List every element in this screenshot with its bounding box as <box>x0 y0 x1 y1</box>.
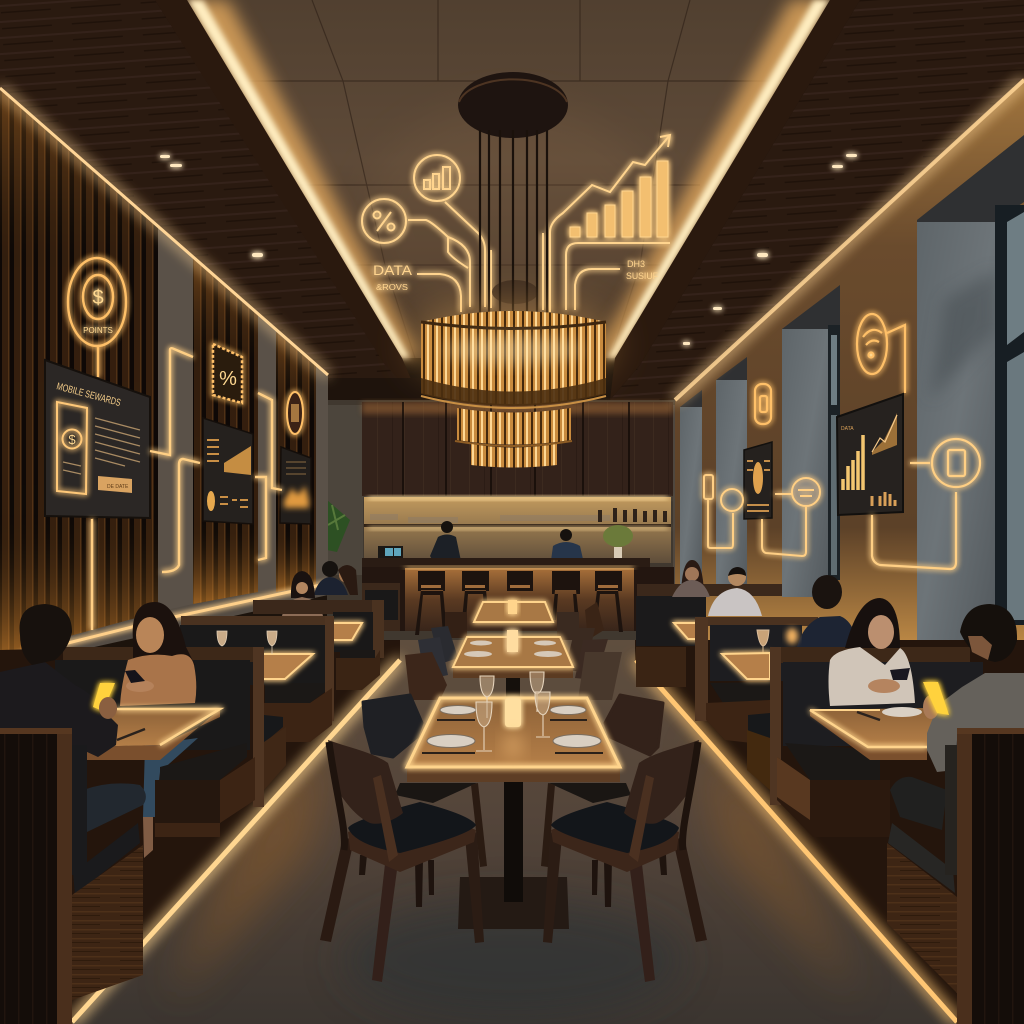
data label neon: DATA <box>373 262 413 278</box>
lower crystal tier <box>471 444 557 468</box>
top crystal tier <box>413 305 613 408</box>
growth bars <box>570 161 668 237</box>
concrete ceiling panel <box>185 0 830 358</box>
window <box>995 205 1024 625</box>
front right table <box>810 707 947 760</box>
sweater <box>120 654 196 706</box>
diner woman back booth <box>282 571 323 616</box>
recessed ceiling lights <box>160 154 857 345</box>
right booth platform <box>635 640 1024 1024</box>
wall bottom glow line <box>0 583 330 660</box>
front left table <box>80 709 220 760</box>
icon: circle node <box>762 478 820 556</box>
concrete recess 1 <box>917 135 1024 642</box>
left timber soffit <box>0 0 420 402</box>
front back-row chairs <box>359 695 667 895</box>
wine glasses <box>476 672 550 751</box>
wall top glow line <box>0 88 328 375</box>
diner man white shirt <box>708 567 762 616</box>
dashboard screen 3 <box>280 447 311 524</box>
plates <box>427 706 601 748</box>
data label neon <box>373 262 413 292</box>
panel: right wall <box>675 78 1024 642</box>
main table <box>407 672 620 782</box>
candle <box>503 698 523 759</box>
front right partition <box>957 728 1024 1024</box>
circuit lines left <box>408 202 491 312</box>
right timber soffit <box>610 0 1024 400</box>
data label neon: &ROVS <box>376 283 408 292</box>
main table pedestal <box>458 782 569 929</box>
large analytics screen <box>837 394 903 515</box>
booth 2 <box>180 616 334 742</box>
icon: wifi badge <box>857 314 905 393</box>
points badge: $ <box>92 287 104 309</box>
hair <box>133 602 195 665</box>
middle table <box>453 630 573 703</box>
mobile rewards screen: MOBILE SEWARDS <box>55 381 122 409</box>
diner woman far right <box>672 560 710 597</box>
wine glass and table booth 2 <box>722 630 770 679</box>
diner man dark suit <box>786 575 857 647</box>
ceiling canopy <box>458 72 568 304</box>
large analytics screen: DATA <box>841 426 854 432</box>
icon: percent coupon: % <box>219 368 237 390</box>
face <box>136 617 164 653</box>
chair: front left <box>320 740 484 982</box>
man front left <box>0 604 146 840</box>
far right booth <box>636 584 782 687</box>
icon: rounded device <box>755 384 771 424</box>
right wall neon signage <box>704 314 980 569</box>
POS screen <box>378 546 403 558</box>
diner woman front left <box>120 602 198 858</box>
left booth platform <box>0 640 400 1024</box>
far dining table <box>445 600 579 640</box>
chair: front right <box>543 740 707 982</box>
growth arrow line <box>543 135 670 312</box>
lit back shelves <box>364 496 671 563</box>
phone glowing <box>93 683 115 711</box>
foot <box>143 817 153 858</box>
ceiling neon data graphics <box>362 135 670 312</box>
dashboard screen 2 <box>203 418 253 524</box>
mobile rewards screen <box>45 360 150 518</box>
panel: back wall and bar <box>327 400 682 640</box>
concrete recess 2 <box>782 285 840 597</box>
icon: percent coupon <box>213 344 242 403</box>
wine glasses booth 2 <box>217 631 277 654</box>
points badge <box>68 258 126 377</box>
chandelier <box>413 72 613 468</box>
front left seat cushion and box <box>72 745 143 1000</box>
points badge: POINTS <box>83 326 113 335</box>
plant left <box>327 500 350 552</box>
trousers <box>83 783 146 832</box>
bar counter <box>362 558 674 631</box>
barista left <box>430 521 461 561</box>
neon caption right <box>626 259 658 281</box>
front left partition <box>0 728 72 1024</box>
icon: tablet circle <box>872 439 980 569</box>
jeans <box>143 738 198 817</box>
middle crystal tier <box>455 408 572 446</box>
panel: left wall <box>0 88 330 668</box>
floor glow strip left <box>72 660 400 1022</box>
floor glow strip right <box>636 660 957 1022</box>
neon connector lines <box>92 348 282 630</box>
diners far left <box>314 561 358 595</box>
icon: small device and circle <box>704 475 743 548</box>
diner woman front right <box>828 598 915 706</box>
potted plant right <box>603 525 633 561</box>
mid dashboard screen <box>744 442 772 519</box>
hand <box>99 697 117 719</box>
bar stools <box>415 571 623 635</box>
far booth <box>362 583 400 631</box>
mobile rewards screen: DE DATE <box>107 484 129 490</box>
head <box>20 604 72 665</box>
barista right <box>550 529 585 568</box>
mobile rewards screen: $ <box>68 432 76 447</box>
panel: far left booths <box>0 561 400 1024</box>
ceiling light coves <box>185 0 830 358</box>
cutlery <box>422 720 603 753</box>
right wall top glow <box>675 80 1024 400</box>
neon caption right: SUSIUF <box>626 271 658 281</box>
front right booth back <box>747 647 983 837</box>
concrete recess 3 <box>716 357 747 595</box>
hanging rods <box>480 130 547 325</box>
icon: bar chart circle <box>414 155 460 201</box>
panel: right booths <box>636 560 1024 1024</box>
neon caption right: DH3 <box>627 259 645 269</box>
oval icon <box>287 392 303 434</box>
concrete recess 4 <box>680 390 702 587</box>
front right seat and box <box>887 745 957 993</box>
front left booth back <box>55 647 286 807</box>
booth 3 frame <box>253 600 384 690</box>
left wall neon signage <box>45 258 311 630</box>
floor <box>70 640 957 1024</box>
man front right <box>890 604 1024 830</box>
jacket <box>0 662 118 840</box>
upper wood cabinets <box>362 402 673 496</box>
circuit lines right <box>566 243 670 310</box>
booth 2 right frame <box>695 617 818 745</box>
hands <box>126 680 154 692</box>
phone <box>125 670 145 683</box>
icon: percent circle <box>362 199 406 243</box>
front left seat <box>155 743 255 837</box>
middle table chairs <box>405 602 622 700</box>
